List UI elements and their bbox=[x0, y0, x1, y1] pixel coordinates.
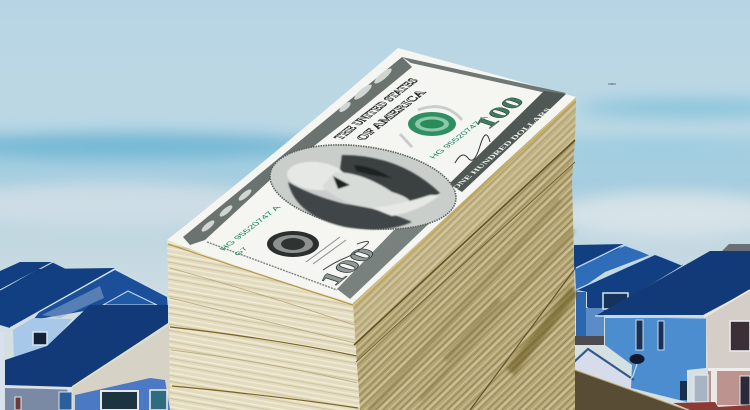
porch door bbox=[740, 376, 750, 405]
left face seams bbox=[168, 244, 358, 408]
side windows bbox=[636, 320, 643, 350]
upper gable window bbox=[603, 293, 628, 309]
upper house roof bbox=[0, 268, 115, 328]
garage front bbox=[572, 350, 631, 390]
second house wall bbox=[577, 255, 683, 315]
green treasury seal bbox=[408, 112, 456, 136]
big 100 lower left: 100 bbox=[311, 244, 383, 289]
back roof trim bbox=[0, 262, 69, 290]
wall shadow bbox=[75, 378, 170, 410]
foreground dark roof bbox=[572, 369, 687, 410]
second roof trim bbox=[576, 244, 682, 290]
garage roof band bbox=[574, 336, 604, 345]
collar bbox=[372, 195, 440, 216]
eyes bbox=[333, 165, 392, 189]
lower hair sweep bbox=[288, 182, 412, 230]
back roof left bbox=[0, 262, 69, 300]
front roof bbox=[5, 305, 168, 387]
band ovals bbox=[200, 66, 393, 233]
lower light-blue house wall bbox=[13, 318, 72, 360]
treasury title line 2: OF AMERICA bbox=[353, 88, 429, 142]
houses on the right bbox=[572, 244, 750, 410]
rear roof peak bbox=[722, 244, 750, 251]
main roof bbox=[597, 251, 750, 315]
upper house gable wall bbox=[33, 270, 168, 320]
top right 100: 100 bbox=[469, 94, 531, 132]
small window bbox=[33, 332, 47, 345]
left face of the stack bbox=[167, 240, 360, 410]
dark hair at the top right of the head bbox=[340, 155, 440, 201]
top bill bbox=[167, 48, 576, 303]
lower window bbox=[101, 391, 138, 410]
small window on grey wall bbox=[15, 397, 21, 410]
right face shading bbox=[354, 101, 575, 410]
left side wall bbox=[576, 292, 586, 336]
large window bbox=[730, 321, 750, 351]
one hundred dollars: ONE HUNDRED DOLLARS bbox=[450, 107, 553, 191]
grey lower wall bbox=[5, 388, 72, 410]
black federal reserve seal bbox=[267, 231, 319, 257]
blue wall bbox=[605, 318, 706, 402]
treasury title line 1: THE UNITED STATES bbox=[331, 77, 421, 141]
serial number lower: HG 95520747 A bbox=[218, 205, 284, 252]
corner post bbox=[0, 332, 4, 410]
face bbox=[322, 172, 410, 208]
back house roof bbox=[574, 244, 625, 270]
treasurer signature bbox=[455, 135, 490, 163]
serial number upper: HG 95520747 A bbox=[428, 115, 491, 160]
small gable bbox=[103, 291, 157, 305]
back house wall bbox=[575, 246, 650, 292]
bill paper bbox=[167, 48, 576, 303]
series code: G7 bbox=[232, 246, 250, 257]
lighter top block of the right face bbox=[353, 97, 576, 345]
porch bbox=[708, 370, 750, 405]
blue wall door bbox=[694, 375, 708, 402]
houses on the left bbox=[0, 262, 170, 410]
gable windows bbox=[42, 286, 104, 318]
top short edge band bbox=[402, 57, 566, 96]
right face of the stack bbox=[353, 97, 576, 410]
front roof trim bbox=[72, 323, 170, 387]
faint ghost ring behind seal bbox=[400, 107, 462, 147]
lower left band bbox=[337, 215, 438, 299]
federal reserve signature bbox=[323, 241, 369, 270]
beige wall bbox=[706, 290, 750, 369]
portrait oval bbox=[245, 142, 481, 232]
lower left dotted edge bbox=[207, 242, 337, 290]
bird in the sky bbox=[608, 83, 616, 85]
stack of bills bbox=[167, 48, 576, 410]
beige wall bbox=[72, 325, 170, 410]
upper ornate band bbox=[183, 57, 412, 245]
ground and red mulch bbox=[673, 402, 750, 410]
forehead bbox=[286, 160, 346, 192]
beige roof trim bbox=[704, 290, 750, 317]
lower door window bbox=[150, 390, 167, 410]
satellite dish bbox=[630, 354, 644, 380]
upper house roof trim bbox=[10, 269, 167, 328]
lower right band bbox=[449, 91, 566, 192]
eave line bbox=[595, 316, 706, 318]
small print bbox=[306, 237, 346, 264]
